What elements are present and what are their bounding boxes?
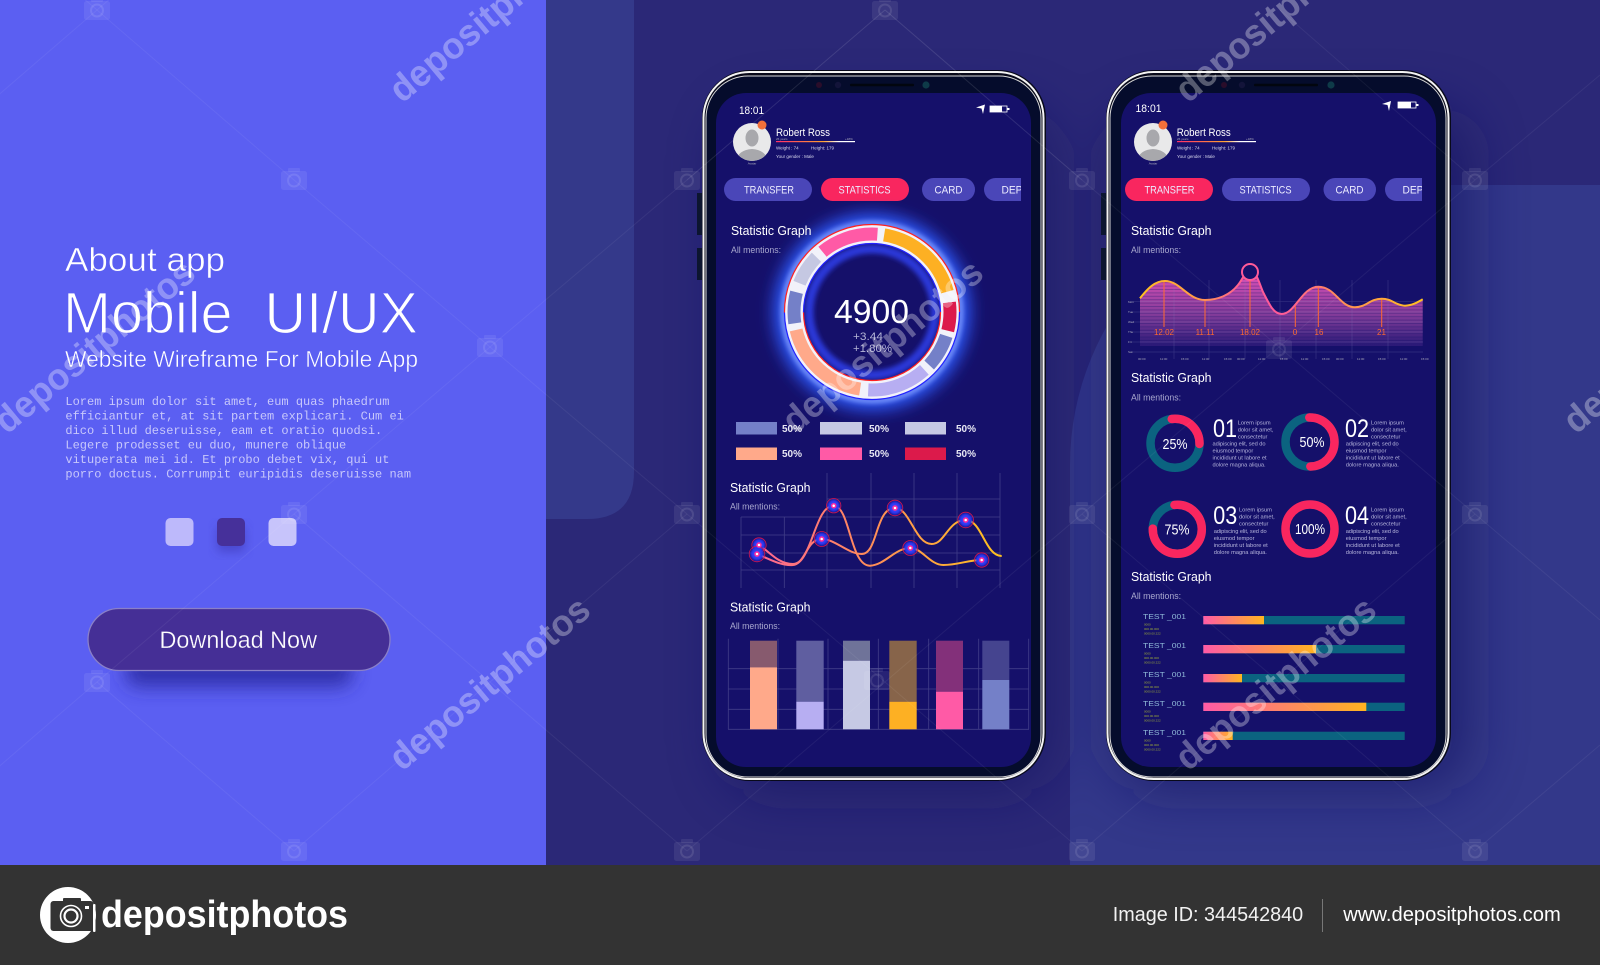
ring 25%: incididunt ut labore et	[1212, 456, 1267, 462]
legend: 50%	[869, 424, 889, 435]
bar labels: 0000	[1144, 710, 1151, 714]
line chart	[741, 473, 1002, 588]
area chart axis labels: 11:00	[1301, 357, 1309, 361]
panel: lighter right block	[1070, 185, 1600, 870]
bar labels: 0000	[1144, 622, 1151, 626]
panel: lighter left block	[546, 0, 634, 519]
ring 75%: consectetur	[1239, 522, 1269, 528]
ring 25%: 01	[1213, 415, 1237, 443]
body text: Legere prodesset eu duo, munere oblique	[65, 438, 346, 452]
download button: Download Now	[160, 627, 318, 654]
body text: Lorem ipsum dolor sit amet, eum quas phaedrum	[65, 395, 389, 409]
area chart: 18.02	[1240, 328, 1261, 337]
tabs: TRANSFER	[744, 184, 794, 196]
heading: statistic graph 2: All mentions:	[730, 502, 780, 512]
bar labels: 0000.00.222	[1144, 718, 1161, 722]
ring 75%: Lorem ipsum	[1239, 508, 1272, 514]
phone 1 screen	[716, 93, 1031, 767]
status bar	[739, 104, 1010, 117]
ring 75%: dolor sit amet,	[1239, 514, 1275, 520]
tabs: TRANSFER	[1144, 184, 1195, 196]
bar labels: 000.00.000	[1144, 714, 1159, 718]
subheading: Website Wireframe For Mobile App	[65, 346, 418, 372]
heading: statistic graph 1	[1131, 223, 1212, 255]
area chart axis labels: Mon	[1128, 300, 1134, 304]
bar labels: 000.00.000	[1144, 685, 1159, 689]
ring 100%: Lorem ipsum	[1371, 508, 1404, 514]
bar labels: TEST _001	[1143, 614, 1186, 621]
area chart axis labels: 15:00	[1280, 357, 1288, 361]
area chart: 12.02	[1154, 328, 1175, 337]
profile block	[1134, 120, 1256, 166]
footer bar	[0, 865, 1600, 965]
body text	[65, 395, 411, 482]
ring 50%: 50%	[1300, 434, 1324, 451]
tabs	[1125, 178, 1445, 201]
watermark cameras	[84, 0, 1488, 861]
legend: 50%	[869, 449, 889, 460]
ring 25%	[1150, 415, 1274, 468]
watermark text: depositphotos	[381, 588, 598, 778]
bar labels	[1143, 614, 1186, 752]
ring 75%: adipiscing elit, sed do	[1214, 529, 1267, 535]
ring 100%: dolore magna aliqua.	[1346, 550, 1399, 556]
area chart: 0	[1293, 328, 1298, 337]
ring 100%: 100%	[1295, 521, 1325, 538]
area chart: 21	[1377, 328, 1386, 337]
area chart axis labels: Wed	[1128, 320, 1134, 324]
profile block: 26 years	[776, 137, 788, 141]
heading: statistic graph 2: Statistic Graph	[730, 480, 810, 495]
bar labels: 0000	[1144, 652, 1151, 656]
area chart axis labels: Tue	[1128, 310, 1133, 314]
panel: about app	[0, 0, 546, 865]
ring 75%: eiusmod tempor	[1214, 536, 1255, 542]
ring 25%: dolor sit amet,	[1238, 428, 1274, 434]
ring 50%: adipiscing elit, sed do	[1346, 442, 1399, 448]
area chart axis labels: 11:00	[1202, 357, 1210, 361]
heading: statistic graph 1: Statistic Graph	[731, 223, 812, 238]
profile block: Robert Ross	[776, 127, 830, 139]
area chart axis labels: 00:00	[1237, 357, 1245, 361]
legend	[736, 422, 976, 460]
donut chart: 4900	[834, 293, 909, 330]
ring 50%: eiusmod tempor	[1346, 448, 1387, 454]
body text: efficiantur et, at sit partem explicari. Cum ei	[65, 410, 404, 424]
profile block: Robert Ross	[1177, 127, 1231, 139]
area chart axis labels: 11:00	[1160, 357, 1168, 361]
pagination dots	[166, 518, 296, 552]
phone 2 screen	[1121, 93, 1436, 767]
area chart axis labels: 15:00	[1322, 357, 1330, 361]
area chart axis labels: 15:00	[1224, 357, 1232, 361]
donut chart: +3.44	[853, 331, 883, 343]
ring 75%	[1153, 502, 1275, 556]
heading: statistic graph 2: All mentions:	[1131, 392, 1181, 402]
heading: statistic graph 3: Statistic Graph	[1131, 569, 1212, 584]
tabs: CARD	[934, 184, 963, 196]
heading: statistic graph 3: All mentions:	[1131, 591, 1181, 601]
heading: statistic graph 1: Statistic Graph	[1131, 223, 1212, 238]
area chart axis labels: 15:00	[1421, 357, 1429, 361]
ring 100%: incididunt ut labore et	[1346, 543, 1400, 549]
ring 50%	[1286, 415, 1407, 468]
ring 50%: dolor sit amet,	[1371, 428, 1407, 434]
bar labels: 0000.00.222	[1144, 748, 1161, 752]
phone 2: transfer	[1101, 70, 1451, 781]
ring 100%: eiusmod tempor	[1346, 536, 1387, 542]
ring 25%: consectetur	[1238, 434, 1268, 440]
area chart axis labels	[1128, 300, 1429, 361]
phone 1 frame	[697, 70, 1046, 781]
phone shadows	[725, 110, 1470, 790]
area chart axis labels: Thu	[1128, 330, 1134, 334]
ring 50%: consectetur	[1371, 434, 1401, 440]
bar labels: 0000.00.222	[1144, 690, 1161, 694]
area chart axis labels: 00:00	[1138, 357, 1146, 361]
profile block: Your gender : Male	[1177, 154, 1215, 159]
watermark text: depositphotos	[1167, 588, 1384, 778]
ring 50%: 02	[1345, 415, 1369, 443]
profile block: +18%	[845, 137, 853, 141]
profile block: Height: 179	[811, 146, 835, 150]
area chart axis labels: Sat	[1128, 350, 1133, 354]
legend: 50%	[782, 449, 802, 460]
watermark text: depositphotos	[774, 251, 991, 441]
bar labels: 000.00.000	[1144, 656, 1159, 660]
heading: statistic graph 2	[730, 480, 810, 512]
avatar: Avatar	[1149, 162, 1157, 166]
area chart	[1128, 264, 1429, 361]
image id: Image ID: 344542840	[1113, 904, 1303, 926]
heading: statistic graph 3: All mentions:	[730, 621, 780, 631]
area chart: 11.11	[1196, 328, 1215, 337]
ring 25%: Lorem ipsum	[1238, 420, 1271, 426]
ring 100%	[1286, 502, 1407, 556]
heading: statistic graph 1	[731, 223, 812, 255]
donut chart: +1.80%	[853, 343, 892, 355]
bar labels: TEST _001	[1143, 701, 1186, 708]
heading: statistic graph 3: Statistic Graph	[730, 600, 810, 614]
profile block: +18%	[1246, 137, 1254, 141]
bar labels: 000.00.000	[1144, 743, 1159, 747]
tabs: STATISTICS	[1240, 184, 1292, 196]
ring 75%: 75%	[1164, 522, 1190, 538]
ring 75%: 03	[1213, 502, 1237, 530]
bar labels: 0000.00.222	[1144, 632, 1161, 636]
tabs: CARD	[1336, 184, 1364, 196]
bar labels: TEST _001	[1143, 643, 1186, 650]
body text: porro doctus. Corrumpit euripidis deseruisse nam	[65, 468, 411, 482]
avatar: Avatar	[748, 162, 756, 166]
ring 100%: adipiscing elit, sed do	[1346, 529, 1399, 535]
ring 25%: eiusmod tempor	[1212, 448, 1253, 454]
legend: 50%	[956, 424, 976, 435]
ring 50%: incididunt ut labore et	[1346, 456, 1400, 462]
profile block: Weight : 74	[776, 146, 799, 150]
progress rings	[1150, 415, 1407, 556]
ring 100%: consectetur	[1371, 522, 1401, 528]
area chart axis labels: 11:00	[1258, 357, 1266, 361]
ring 50%: Lorem ipsum	[1371, 420, 1404, 426]
website: www.depositphotos.com	[1342, 904, 1561, 926]
bar labels: TEST _001	[1143, 672, 1186, 679]
heading: mobile UI/UX: Mobile UI/UX	[63, 281, 418, 346]
ring 25%: adipiscing elit, sed do	[1212, 442, 1266, 448]
ring 75%: dolore magna aliqua.	[1214, 550, 1267, 556]
bar labels: 0000	[1144, 738, 1151, 742]
bar chart	[728, 639, 1029, 729]
bar labels: 0000	[1144, 680, 1151, 684]
area chart axis labels: 00:00	[1336, 357, 1344, 361]
ring 100%: dolor sit amet,	[1371, 514, 1407, 520]
tabs: STATISTICS	[838, 184, 890, 196]
status bar	[1136, 101, 1418, 115]
donut chart	[783, 223, 961, 401]
profile block: Weight : 74	[1177, 146, 1200, 150]
logo: depositphotos	[101, 894, 348, 936]
donut segments	[784, 224, 960, 400]
heading: statistic graph 1: All mentions:	[731, 245, 781, 255]
ring 50%: dolore magna aliqua.	[1346, 462, 1399, 468]
tabs: DEP	[1002, 184, 1022, 196]
legend: 50%	[956, 449, 976, 460]
area chart: 16	[1315, 328, 1324, 337]
body text: dico illud deseruisse, eam et oratio quodsi.	[65, 424, 382, 438]
horizontal bars	[1143, 614, 1405, 752]
heading: statistic graph 3	[730, 600, 810, 631]
ring 100%: 04	[1345, 502, 1369, 530]
download button	[88, 608, 390, 687]
ring 25%: 25%	[1162, 436, 1188, 453]
ring 75%: incididunt ut labore et	[1214, 543, 1268, 549]
profile block: Your gender : Male	[776, 154, 814, 159]
status bar: 18:01	[1136, 103, 1162, 115]
body text: vituperata mei id. Et probo debet vix, qui ut	[65, 453, 389, 467]
area chart axis labels: Fri	[1128, 340, 1132, 344]
area chart axis labels: 11:00	[1357, 357, 1365, 361]
tabs	[724, 178, 1044, 201]
area chart axis labels: 15:00	[1378, 357, 1386, 361]
area chart axis labels: 11:00	[1400, 357, 1408, 361]
bar labels: 000.00.000	[1144, 627, 1159, 631]
heading: statistic graph 2	[1131, 370, 1212, 402]
heading: statistic graph 3	[1131, 569, 1212, 601]
phone 2 frame	[1101, 70, 1451, 781]
logo	[40, 887, 348, 943]
area chart axis labels: 15:00	[1181, 357, 1189, 361]
line chart markers	[749, 498, 989, 567]
status bar: 18:01	[739, 105, 764, 117]
profile block: Height: 179	[1212, 146, 1236, 150]
bar labels: TEST _001	[1143, 730, 1186, 737]
phone 1: statistics	[697, 70, 1046, 781]
heading: statistic graph 1: All mentions:	[1131, 245, 1181, 255]
bar labels: 0000.00.222	[1144, 660, 1161, 664]
profile block: 26 years	[1177, 137, 1189, 141]
legend: 50%	[782, 424, 802, 435]
tabs: DEP	[1402, 184, 1424, 196]
heading: about app: About app	[65, 241, 225, 278]
ring 25%: dolore magna aliqua.	[1212, 462, 1266, 468]
heading: statistic graph 2: Statistic Graph	[1131, 370, 1212, 385]
profile block	[733, 120, 855, 166]
